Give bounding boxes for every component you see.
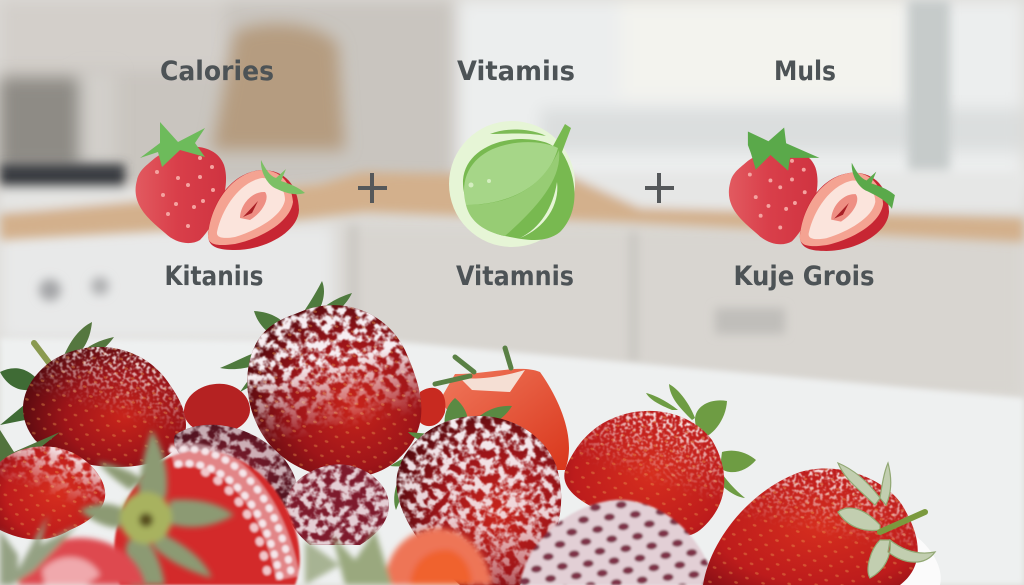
berry: front blurred large — [114, 449, 300, 585]
berry: bottom frosted — [520, 500, 715, 585]
calyx: blurred front — [80, 430, 234, 585]
berry: large frosted centre — [220, 281, 421, 478]
berry: right centre — [564, 384, 756, 537]
berry: small frosted — [286, 464, 389, 545]
berry: cut back right — [418, 348, 569, 470]
column 1: calories — [136, 56, 305, 292]
berry: frosted middle — [390, 398, 561, 585]
berry: bottom right — [703, 463, 935, 585]
bowl edge — [890, 525, 941, 585]
berry: dark frosted behind — [174, 425, 297, 510]
label: Kitaniis: Kitaniıs — [164, 261, 264, 292]
berry: bottom centre blurred — [305, 528, 492, 585]
operator: plus 2 — [645, 173, 674, 203]
berry: front left — [0, 430, 105, 539]
label: Vitamnis: Vitamnis — [456, 261, 574, 292]
label: Kuje Grois: Kuje Grois — [734, 261, 874, 292]
strawberry pile photograph — [0, 281, 941, 585]
berry: small back — [184, 384, 250, 434]
berry: bottom left blurred — [0, 515, 145, 585]
heading: Muls: Muls — [774, 56, 836, 87]
operator: plus 1 — [358, 173, 387, 203]
icon: green fruit — [449, 121, 575, 247]
icon: strawberry pair 2 — [729, 128, 895, 251]
column 2: vitamins — [449, 56, 575, 292]
icon: strawberry pair — [136, 122, 305, 250]
berry: far left — [0, 322, 186, 467]
heading: Calories: Calories — [160, 56, 274, 87]
heading: Vitamins: Vitamiıs — [457, 56, 575, 87]
column 3: muls — [729, 56, 895, 292]
